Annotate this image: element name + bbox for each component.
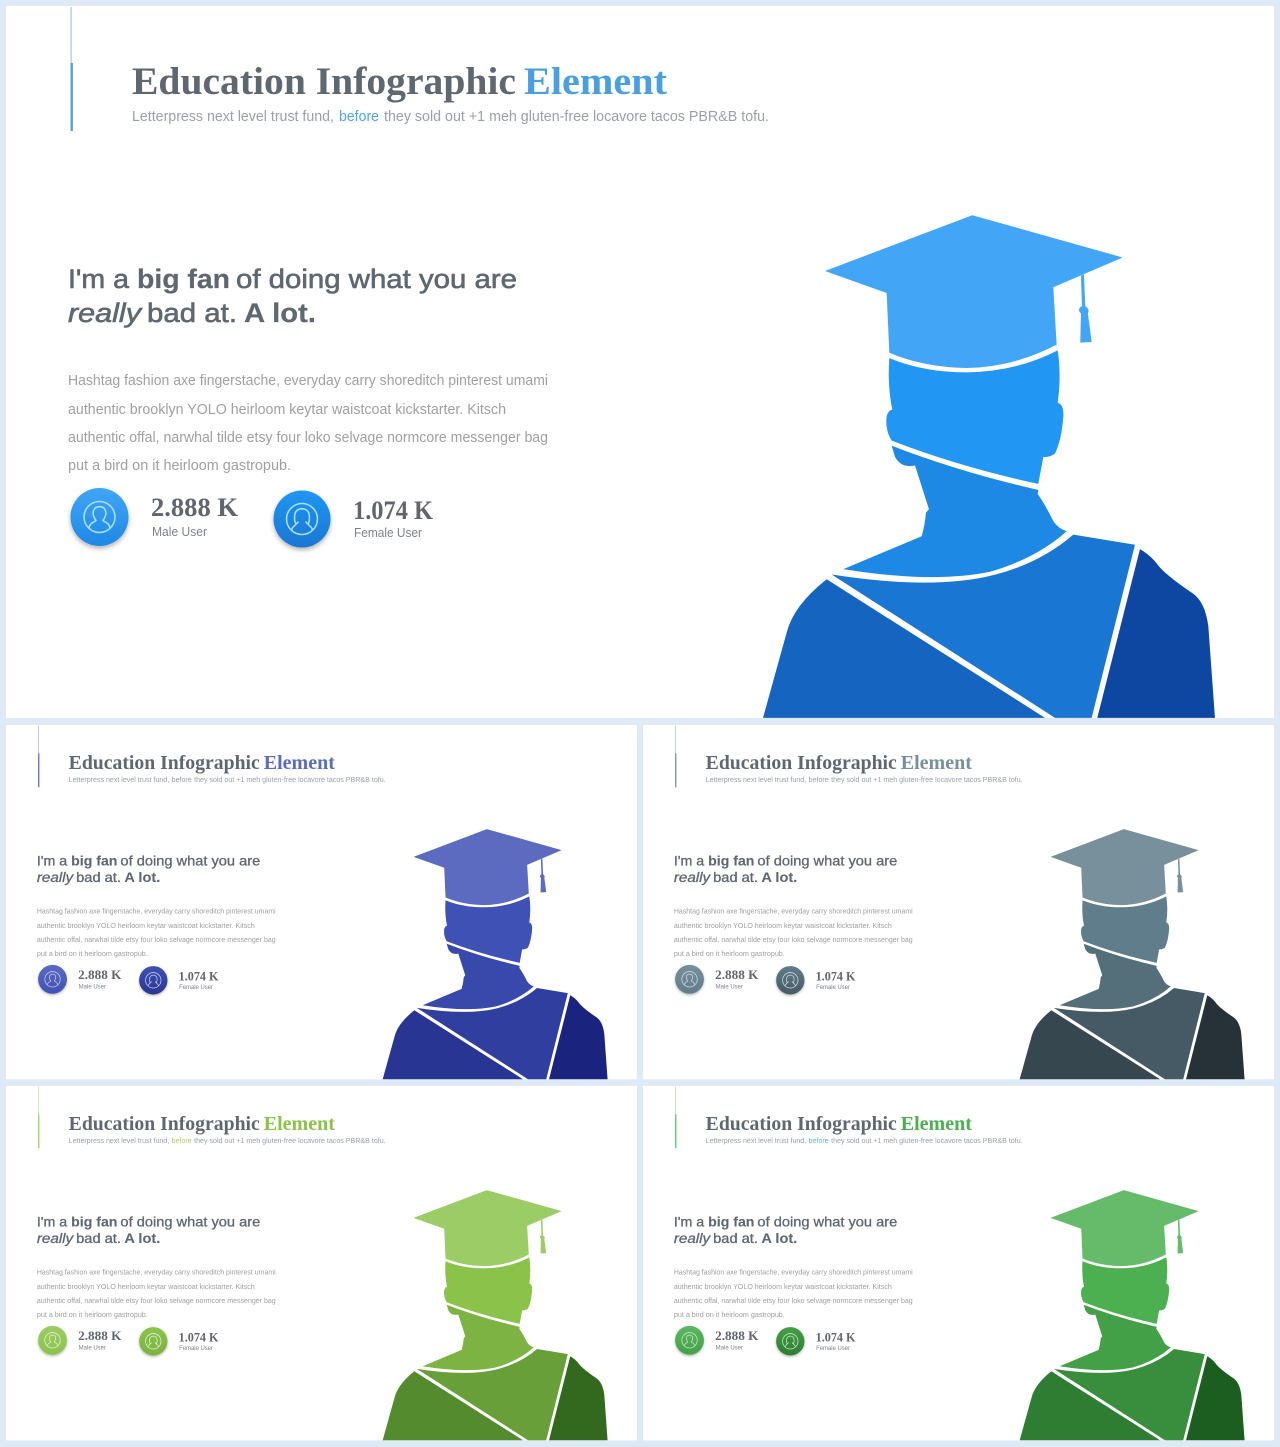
heading: big fan [708, 1214, 754, 1229]
heading: bad at. [147, 298, 237, 328]
stat: female user [816, 968, 855, 991]
heading: I'm a [674, 853, 705, 868]
accent line [675, 725, 676, 787]
body text: authentic offal, narwhal tilde etsy four loko selvage normcore messenger bag [37, 935, 276, 944]
heading: I'm a [674, 1214, 705, 1229]
stat: female user: 1.074 K [816, 968, 855, 983]
body text: authentic brooklyn YOLO heirloom keytar waistcoat kickstarter. Kitsch [674, 1282, 892, 1291]
subtitle: before [339, 109, 379, 125]
subtitle: before [172, 1136, 192, 1145]
stat: male user [151, 493, 239, 539]
accent line [38, 725, 39, 787]
stat: male user [78, 1328, 121, 1352]
title: Element [901, 1113, 972, 1135]
heading [68, 264, 517, 328]
body text [37, 1268, 276, 1319]
graduate silhouette [1020, 1190, 1245, 1440]
body text: authentic offal, narwhal tilde etsy four loko selvage normcore messenger bag [674, 1296, 913, 1305]
stat: female user: Female User [816, 984, 851, 991]
body text: Hashtag fashion axe fingerstache, everyday carry shoreditch pinterest umami [674, 1268, 913, 1277]
heading: of doing what you are [120, 853, 260, 868]
stat: male user: 2.888 K [715, 1328, 758, 1343]
heading: A lot. [761, 870, 797, 885]
body text: Hashtag fashion axe fingerstache, everyday carry shoreditch pinterest umami [37, 907, 276, 916]
body text: authentic offal, narwhal tilde etsy four loko selvage normcore messenger bag [674, 935, 913, 944]
title: Education Infographic [706, 1113, 897, 1135]
stat: female user: 1.074 K [179, 968, 218, 983]
title: Education Infographic [706, 752, 897, 774]
body text: put a bird on it heirloom gastropub. [674, 1310, 785, 1319]
icon: male user [675, 1326, 704, 1355]
body text: authentic brooklyn YOLO heirloom keytar waistcoat kickstarter. Kitsch [68, 402, 506, 418]
heading: of doing what you are [757, 1214, 897, 1229]
heading: really [37, 870, 75, 885]
graduate silhouette [383, 829, 608, 1079]
body text [674, 907, 913, 958]
stat: female user: Female User [179, 1345, 214, 1352]
title: Education Infographic [132, 59, 516, 103]
panel: blue slide [6, 6, 1274, 718]
body text: put a bird on it heirloom gastropub. [37, 1310, 148, 1319]
subtitle: Letterpress next level trust fund, [69, 775, 169, 784]
heading: really [674, 1231, 712, 1246]
subtitle: they sold out +1 meh gluten-free locavore tacos PBR&B tofu. [384, 109, 769, 125]
heading: A lot. [244, 298, 316, 328]
icon: female user [274, 490, 330, 548]
subtitle [706, 1136, 1023, 1145]
body text: authentic offal, narwhal tilde etsy four loko selvage normcore messenger bag [68, 430, 548, 446]
stat: female user [816, 1329, 855, 1352]
stat: female user [353, 496, 434, 540]
stat: male user: Male User [79, 984, 107, 991]
title: Element [264, 752, 335, 774]
heading [37, 853, 260, 885]
heading: of doing what you are [757, 853, 897, 868]
subtitle: Letterpress next level trust fund, [69, 1136, 169, 1145]
panel: light green slide [6, 1086, 637, 1440]
body text: Hashtag fashion axe fingerstache, everyday carry shoreditch pinterest umami [37, 1268, 276, 1277]
heading: A lot. [761, 1231, 797, 1246]
body text: authentic brooklyn YOLO heirloom keytar waistcoat kickstarter. Kitsch [674, 921, 892, 930]
subtitle: Letterpress next level trust fund, [706, 1136, 806, 1145]
icon: female user [139, 1327, 167, 1355]
stat: male user [78, 967, 121, 991]
body text [37, 907, 276, 958]
heading: big fan [137, 264, 230, 294]
graduate silhouette [763, 215, 1215, 718]
panel: indigo slide [6, 725, 637, 1079]
stat: male user: Male User [716, 984, 744, 991]
heading: really [37, 1231, 75, 1246]
graduate silhouette [383, 1190, 608, 1440]
subtitle [69, 1136, 386, 1145]
icon: male user [38, 1326, 67, 1355]
subtitle: they sold out +1 meh gluten-free locavore tacos PBR&B tofu. [831, 775, 1023, 784]
subtitle: they sold out +1 meh gluten-free locavore tacos PBR&B tofu. [194, 775, 386, 784]
panel: blue-grey slide [643, 725, 1274, 1079]
subtitle: before [809, 1136, 829, 1145]
subtitle: before [809, 775, 829, 784]
heading: really [68, 298, 143, 328]
stat: male user [715, 967, 758, 991]
stat: male user: Male User [79, 1345, 107, 1352]
accent line [70, 7, 73, 131]
body text: Hashtag fashion axe fingerstache, everyday carry shoreditch pinterest umami [674, 907, 913, 916]
body text [68, 373, 548, 474]
heading [37, 1214, 260, 1246]
icon: female user [139, 966, 167, 994]
subtitle: Letterpress next level trust fund, [132, 109, 334, 125]
body text: put a bird on it heirloom gastropub. [68, 458, 291, 474]
heading: A lot. [124, 1231, 160, 1246]
title: Education Infographic [69, 752, 260, 774]
icon: female user [776, 966, 804, 994]
heading [674, 1214, 897, 1246]
subtitle [69, 775, 386, 784]
heading: bad at. [76, 1231, 121, 1246]
body text: put a bird on it heirloom gastropub. [674, 949, 785, 958]
stat: female user: 1.074 K [179, 1329, 218, 1344]
heading: of doing what you are [120, 1214, 260, 1229]
icon: male user [675, 965, 704, 994]
body text: authentic brooklyn YOLO heirloom keytar waistcoat kickstarter. Kitsch [37, 921, 255, 930]
stat: male user: Male User [152, 524, 208, 539]
stat: female user [179, 968, 218, 991]
icon: male user [38, 965, 67, 994]
body text [674, 1268, 913, 1319]
stat: male user: 2.888 K [715, 967, 758, 982]
icon: female user [776, 1327, 804, 1355]
subtitle: they sold out +1 meh gluten-free locavore tacos PBR&B tofu. [194, 1136, 386, 1145]
stat: female user: Female User [816, 1345, 851, 1352]
body text: put a bird on it heirloom gastropub. [37, 949, 148, 958]
heading: I'm a [68, 264, 130, 294]
heading: big fan [708, 853, 754, 868]
title: Education Infographic [69, 1113, 260, 1135]
stat: male user [715, 1328, 758, 1352]
title: Element [901, 752, 972, 774]
title: Element [264, 1113, 335, 1135]
heading: A lot. [124, 870, 160, 885]
subtitle [132, 109, 769, 125]
heading: I'm a [37, 853, 68, 868]
heading: big fan [71, 853, 117, 868]
heading: big fan [71, 1214, 117, 1229]
heading: of doing what you are [236, 264, 517, 294]
stat: male user: 2.888 K [151, 493, 239, 522]
accent line [38, 1086, 39, 1148]
stat: female user: Female User [354, 525, 423, 540]
heading: bad at. [76, 870, 121, 885]
panel: green slide [643, 1086, 1274, 1440]
stat: female user: 1.074 K [353, 496, 434, 525]
heading: really [674, 870, 712, 885]
stat: female user [179, 1329, 218, 1352]
stat: male user: 2.888 K [78, 967, 121, 982]
title: Element [524, 59, 667, 103]
heading: bad at. [713, 1231, 758, 1246]
body text: authentic brooklyn YOLO heirloom keytar waistcoat kickstarter. Kitsch [37, 1282, 255, 1291]
heading [674, 853, 897, 885]
heading: bad at. [713, 870, 758, 885]
icon: male user [70, 488, 128, 546]
heading: I'm a [37, 1214, 68, 1229]
subtitle: they sold out +1 meh gluten-free locavore tacos PBR&B tofu. [831, 1136, 1023, 1145]
body text: authentic offal, narwhal tilde etsy four loko selvage normcore messenger bag [37, 1296, 276, 1305]
stat: male user: Male User [716, 1345, 744, 1352]
subtitle: Letterpress next level trust fund, [706, 775, 806, 784]
subtitle: before [172, 775, 192, 784]
subtitle [706, 775, 1023, 784]
accent line [675, 1086, 676, 1148]
stat: female user: Female User [179, 984, 214, 991]
body text: Hashtag fashion axe fingerstache, everyday carry shoreditch pinterest umami [68, 373, 548, 389]
stat: female user: 1.074 K [816, 1329, 855, 1344]
stat: male user: 2.888 K [78, 1328, 121, 1343]
graduate silhouette [1020, 829, 1245, 1079]
